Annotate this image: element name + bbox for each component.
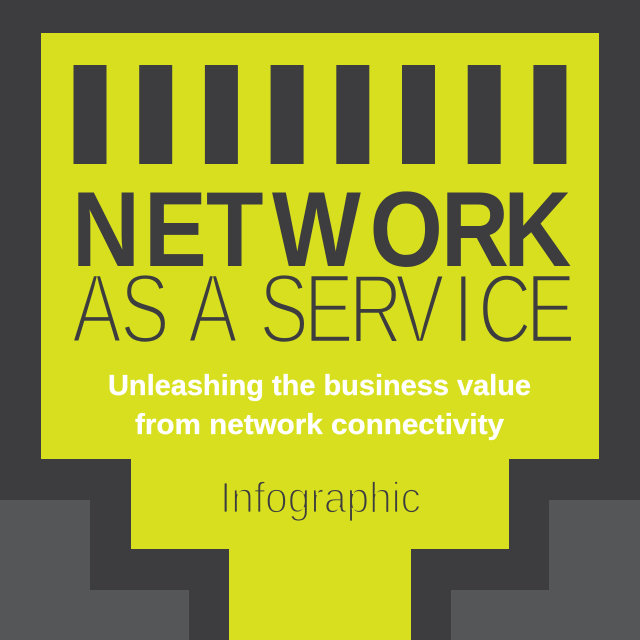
subtitle xyxy=(108,370,531,441)
label: infographic: Infographic xyxy=(220,474,421,522)
panel: right grey step xyxy=(451,500,640,640)
title: as a service: AS A SERVICE xyxy=(72,255,576,364)
icon: plug contact pins xyxy=(74,65,566,164)
subtitle: from network connectivity xyxy=(135,409,504,441)
panel: left grey step xyxy=(0,500,189,640)
title: network: NETWORK xyxy=(72,170,571,289)
subtitle: Unleashing the business value xyxy=(108,370,531,402)
